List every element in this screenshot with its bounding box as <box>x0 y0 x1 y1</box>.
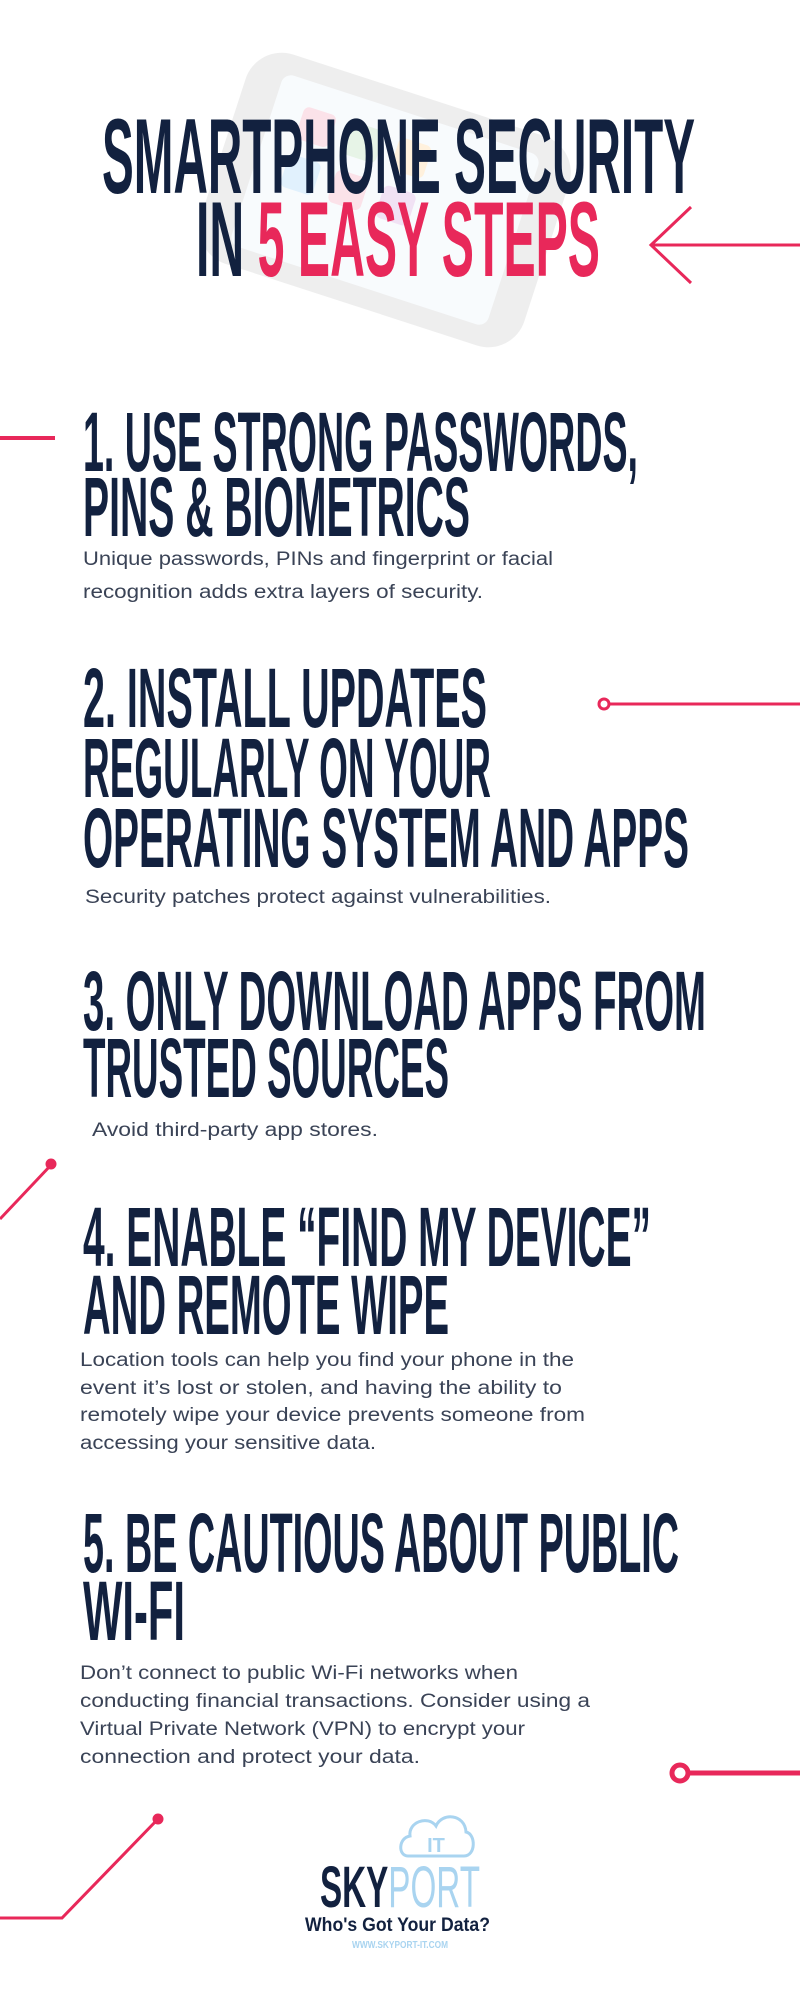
faded phone background image <box>189 43 581 357</box>
step 3 body: Avoid third-party app stores. <box>92 1120 378 1141</box>
step 1 heading <box>83 395 638 554</box>
icon: cloud <box>401 1817 473 1857</box>
connector line step 4 <box>0 1160 55 1219</box>
connector line step 5 <box>672 1765 800 1781</box>
title <box>102 96 695 299</box>
step 4 body: remotely wipe your device prevents someone from <box>80 1405 585 1426</box>
step 2 body: Security patches protect against vulnerabilities. <box>85 887 551 908</box>
step 5 body: Don’t connect to public Wi-Fi networks when <box>80 1663 518 1684</box>
step 5 body: connection and protect your data. <box>80 1747 420 1768</box>
step 3 heading <box>83 954 706 1115</box>
logo: SkyPort IT: SKYPORT <box>320 1855 480 1920</box>
step 4 body <box>80 1350 585 1454</box>
arrow pointing at title <box>651 207 800 283</box>
connector line step 1 <box>0 436 55 440</box>
logo: SkyPort IT: Who's Got Your Data? <box>305 1915 490 1936</box>
step 5 body <box>80 1663 590 1768</box>
step 5 body: conducting financial transactions. Consider using a <box>80 1691 590 1712</box>
logo: SkyPort IT: WWW.SKYPORT-IT.COM <box>352 1940 448 1951</box>
bottom-left connector line <box>0 1815 162 1918</box>
step 4 heading <box>83 1190 651 1352</box>
step 1 body <box>83 549 553 603</box>
logo: SkyPort IT <box>305 1817 490 1951</box>
step 4 body: accessing your sensitive data. <box>80 1433 376 1454</box>
step 4 body: event it’s lost or stolen, and having the ability to <box>80 1378 562 1399</box>
step 1 body: recognition adds extra layers of security. <box>83 582 483 603</box>
step 5 heading <box>83 1496 679 1658</box>
icon: cloud: IT <box>427 1835 445 1857</box>
connector line step 2 <box>599 699 800 709</box>
step 5 heading: WI-FI <box>83 1564 185 1658</box>
step 5 body: Virtual Private Network (VPN) to encrypt your <box>80 1719 526 1740</box>
step 2 heading <box>83 651 689 885</box>
step 4 body: Location tools can help you find your phone in the <box>80 1350 574 1371</box>
step 1 body: Unique passwords, PINs and fingerprint or facial <box>83 549 553 570</box>
